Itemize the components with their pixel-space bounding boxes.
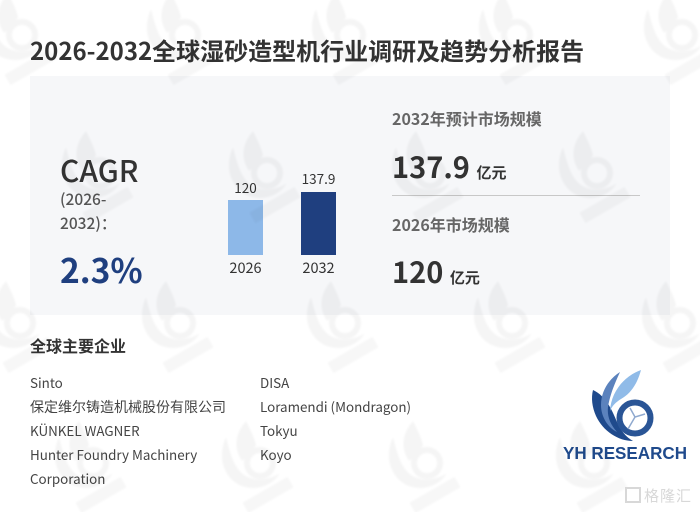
logo: YH Research bbox=[563, 370, 687, 463]
axis label: 2026: 2026 bbox=[229, 257, 262, 278]
bar chart bbox=[228, 168, 336, 278]
bar label: 137.9: 137.9 bbox=[302, 168, 335, 188]
company list: left column: Hunter Foundry Machinery bbox=[30, 444, 197, 464]
CAGR period: 2032)： bbox=[60, 212, 116, 234]
CAGR period bbox=[60, 188, 116, 234]
bar label: 120: 120 bbox=[234, 177, 257, 197]
company list: left column: KÜNKEL WAGNER bbox=[30, 420, 140, 440]
company list: left column: 保定维尔铸造机械股份有限公司 bbox=[30, 397, 226, 417]
axis label: 2032: 2032 bbox=[302, 257, 335, 278]
company list: right column: DISA bbox=[260, 372, 289, 392]
company list: right column: Koyo bbox=[260, 444, 292, 464]
logo text: YH RESEARCH bbox=[563, 443, 687, 463]
CAGR value: 2.3% bbox=[60, 244, 143, 293]
icon: leaves and chart ring bbox=[592, 370, 650, 441]
source watermark badge: 格隆汇 bbox=[644, 485, 692, 506]
stat value: 137.9: 137.9 亿元 bbox=[392, 145, 506, 187]
companies heading: 全球主要企业 bbox=[30, 333, 126, 357]
company list: right column: Tokyu bbox=[260, 420, 298, 440]
bar: 2032 bbox=[301, 192, 336, 255]
company list: right column bbox=[260, 372, 411, 464]
company list: left column bbox=[30, 372, 226, 488]
company list: left column: Corporation bbox=[30, 468, 105, 488]
company list: right column: Loramendi (Mondragon) bbox=[260, 396, 411, 416]
panel: market summary bbox=[30, 76, 670, 315]
CAGR period: (2026- bbox=[60, 188, 106, 210]
CAGR heading: CAGR bbox=[60, 147, 138, 191]
stat value: 120: 120 亿元 bbox=[392, 250, 480, 292]
company list: left column: Sinto bbox=[30, 372, 63, 392]
title: 2026-2032全球湿砂造型机行业调研及趋势分析报告 bbox=[30, 32, 584, 67]
stat label: 2026: 2026年市场规模 bbox=[392, 212, 510, 236]
divider bbox=[392, 195, 640, 196]
bar: 2026 bbox=[228, 200, 263, 255]
stat label: 2032 forecast: 2032年预计市场规模 bbox=[392, 106, 542, 130]
